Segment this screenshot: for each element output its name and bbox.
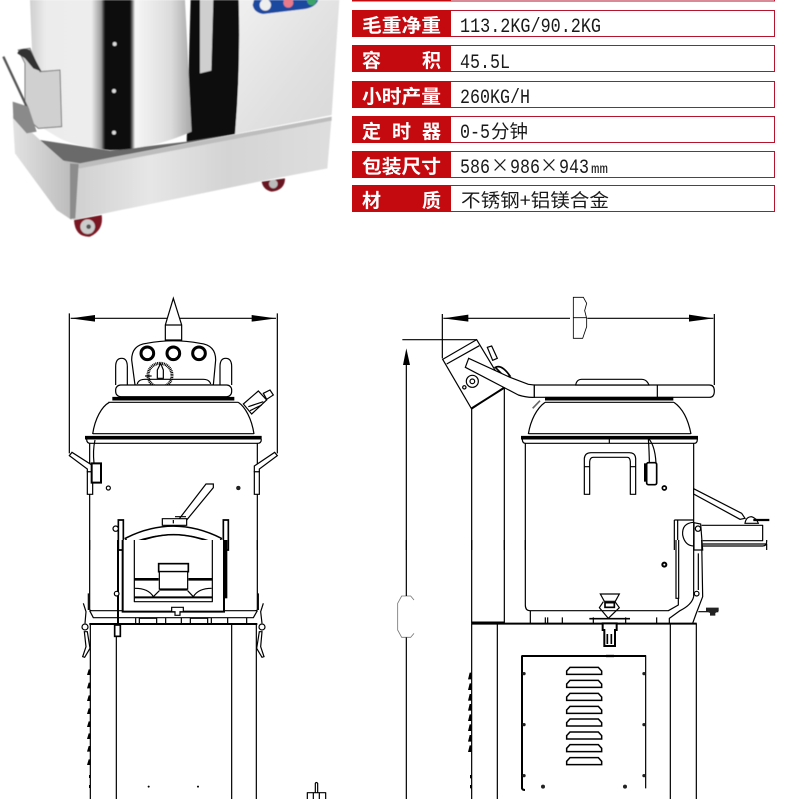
panel screws — [522, 672, 646, 789]
inner tray — [40, 134, 235, 163]
highlight in recess — [200, 0, 213, 73]
door lever side — [694, 489, 769, 523]
base top lip — [63, 117, 332, 168]
steel bowl cylinder — [30, 0, 192, 150]
control panel — [253, 0, 318, 14]
cover cap — [576, 379, 649, 385]
stand — [90, 624, 256, 799]
vent louvers — [567, 667, 602, 765]
lid seals — [112, 393, 234, 404]
side bolts — [468, 673, 471, 788]
lock rod — [114, 540, 120, 636]
spec row: package size: 586 — [460, 157, 490, 180]
right clamp — [257, 593, 265, 657]
latch clamp — [13, 102, 37, 133]
door frame posts — [113, 520, 228, 550]
spec row: package size: 包装尺寸 — [362, 156, 441, 178]
spec row: volume — [352, 45, 774, 75]
rim — [85, 438, 262, 443]
stand — [472, 623, 697, 799]
dome — [528, 402, 691, 434]
spec row: hourly output: 260KG/H — [460, 87, 530, 110]
spec row: timer: 时 — [392, 121, 411, 143]
dark recess column — [187, 0, 239, 143]
door side profile — [674, 520, 767, 550]
width dimension — [442, 314, 714, 385]
timer dial — [145, 363, 172, 387]
panel base arc — [137, 379, 211, 384]
door latch tab — [172, 607, 183, 615]
bowl walls — [525, 443, 694, 550]
machine rear body — [235, 0, 339, 134]
spec row: timer: 分钟 — [491, 118, 528, 144]
spec row: gross and net weight: 113.2KG/90.2KG — [460, 16, 601, 39]
product photo: stainless steel machine — [3, 0, 339, 237]
control knobs — [141, 347, 205, 360]
lid clamp — [645, 437, 657, 485]
hand grips — [116, 358, 232, 385]
width dimension arrow — [69, 313, 277, 453]
base plate — [89, 611, 257, 624]
front hasp — [599, 594, 619, 656]
bowl bottom — [525, 540, 678, 611]
bolt — [662, 486, 666, 490]
spec row: timer: 定 — [362, 120, 381, 143]
spec row: partial top — [352, 0, 774, 1]
door window — [123, 540, 226, 612]
steel base — [13, 115, 332, 220]
cover bar — [116, 385, 232, 397]
base corner shade — [70, 163, 79, 219]
rear caster — [262, 178, 285, 192]
side view technical drawing — [398, 297, 769, 799]
front caster — [74, 215, 102, 237]
height dimension top — [402, 340, 477, 550]
spec row: material: 不锈钢+铝镁合金 — [461, 187, 609, 213]
spec row: hourly output — [352, 81, 774, 110]
door lever — [162, 484, 213, 525]
front view lower part — [82, 540, 326, 799]
cover bar — [534, 385, 714, 397]
stand dots — [148, 786, 199, 788]
spec row: hourly output: 小时产量 — [362, 86, 441, 108]
top pointer — [165, 298, 182, 340]
bolt — [662, 563, 666, 567]
dome lid — [93, 402, 254, 434]
left clamp — [82, 593, 90, 657]
small side tab — [533, 401, 540, 408]
spec row: volume: 容 — [362, 49, 381, 72]
spec row: timer — [352, 116, 774, 145]
height dimension break — [398, 540, 416, 799]
grip arm — [465, 358, 534, 397]
door arch inner — [134, 535, 212, 550]
spec row: package size: mm — [591, 162, 608, 178]
side view lower part — [398, 540, 767, 799]
latch and lever — [3, 48, 62, 133]
spec row: gross and net weight: 毛重净重 — [362, 15, 441, 37]
control panel — [132, 341, 216, 385]
bolts — [106, 486, 240, 490]
spec row: timer: 器 — [422, 122, 441, 143]
column lower — [472, 540, 504, 623]
latch lever — [3, 57, 28, 110]
spec row: package size — [352, 151, 774, 180]
spec row: package size: × — [491, 152, 509, 178]
spec row: material: 材 — [362, 190, 381, 212]
specification table — [352, 0, 774, 213]
right handle — [254, 452, 277, 494]
spec row: volume: 45.5L — [460, 52, 510, 75]
bottom fitting — [307, 782, 326, 799]
side bolts — [87, 669, 91, 788]
spec row: package size: 986 — [510, 157, 540, 180]
u handle — [584, 453, 636, 494]
front view technical drawing — [69, 298, 326, 799]
spec row: package size: 943 — [559, 157, 589, 180]
left handle — [69, 440, 101, 494]
front view upper part — [69, 298, 277, 550]
rivets on bowl — [112, 42, 117, 135]
base front face — [72, 117, 332, 220]
spec row: package size: × — [540, 152, 558, 178]
bowl feet — [530, 611, 657, 623]
spec row: timer: 0-5 — [460, 122, 490, 145]
dimension break mark — [573, 297, 587, 338]
spec row: volume: 积 — [422, 50, 441, 72]
spec row: material — [352, 185, 774, 213]
control buttons — [260, 0, 316, 11]
plug at lid — [243, 390, 273, 414]
bowl walls — [90, 443, 257, 550]
side view upper part — [402, 297, 769, 550]
side frame — [669, 540, 719, 623]
spec row: material: 质 — [422, 189, 441, 212]
lid seal — [545, 393, 673, 404]
latch dark hook — [17, 49, 42, 72]
latch plate — [18, 48, 62, 128]
bowl lower wall — [90, 540, 257, 611]
base left face — [13, 115, 72, 220]
door arch — [125, 526, 221, 546]
door side strip — [676, 540, 679, 598]
spec row: gross and net weight — [352, 10, 774, 39]
column — [472, 387, 504, 550]
inner block — [153, 564, 193, 597]
control box panel — [522, 655, 646, 790]
door arm end — [703, 540, 767, 546]
rim — [521, 438, 698, 443]
tilted control box — [443, 340, 510, 409]
